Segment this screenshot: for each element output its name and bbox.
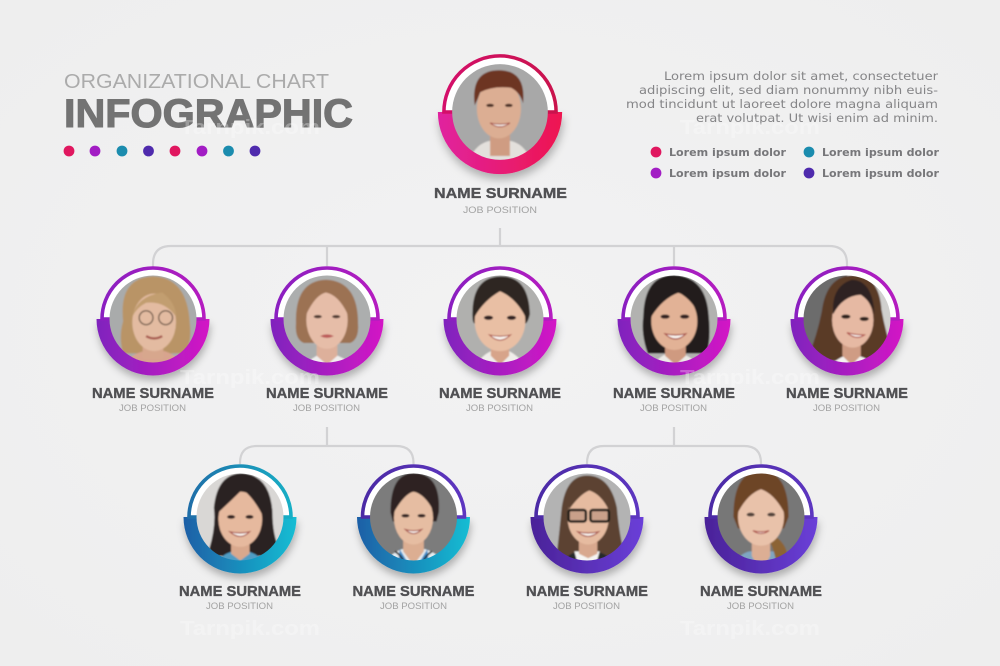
- legend: Lorem ipsum dolor: [669, 147, 787, 159]
- description paragraph: mod tincidunt ut laoreet dolore magna aliquam: [626, 97, 938, 111]
- node: row 2, person 1: NAME SURNAME: [92, 386, 214, 402]
- legend: [651, 147, 940, 180]
- watermarks: Tarnpik.com: [680, 618, 820, 640]
- legend: Lorem ipsum dolor: [822, 147, 940, 159]
- description paragraph: adipiscing elit, sed diam nonummy nibh euis-: [639, 83, 938, 97]
- watermarks: Tarnpik.com: [680, 117, 820, 139]
- title: INFOGRAPHIC: [64, 92, 353, 136]
- title: [64, 71, 353, 136]
- node: row 2, person 3: [439, 268, 561, 413]
- node: row 2, person 1: [92, 268, 214, 413]
- node: row 2, person 5: NAME SURNAME: [786, 386, 908, 402]
- node: row 2, person 1: JOB POSITION: [119, 403, 186, 413]
- node: row 2, person 5: [786, 268, 908, 413]
- org chart connector lines: [153, 228, 847, 464]
- node: top executive: NAME SURNAME: [434, 186, 567, 202]
- node: row 2, person 3: JOB POSITION: [466, 403, 533, 413]
- node: row 3, person 1: NAME SURNAME: [179, 584, 301, 600]
- node: row 2, person 4: NAME SURNAME: [613, 386, 735, 402]
- description paragraph: erat volutpat. Ut wisi enim ad minim.: [696, 111, 938, 125]
- node: row 2, person 2: [266, 268, 388, 413]
- description paragraph: Lorem ipsum dolor sit amet, consectetuer: [664, 69, 938, 83]
- node: row 3, person 4: [700, 466, 822, 611]
- decorative color dots row: [64, 146, 260, 156]
- node: row 3, person 3: JOB POSITION: [553, 601, 620, 611]
- node: top executive: JOB POSITION: [463, 205, 537, 215]
- node: row 3, person 1: JOB POSITION: [206, 601, 273, 611]
- node: row 3, person 4: NAME SURNAME: [700, 584, 822, 600]
- legend: Lorem ipsum dolor: [669, 168, 787, 180]
- description paragraph: [626, 69, 938, 125]
- node: row 2, person 5: JOB POSITION: [813, 403, 880, 413]
- node: row 2, person 3: NAME SURNAME: [439, 386, 561, 402]
- node: row 2, person 2: JOB POSITION: [293, 403, 360, 413]
- node: row 3, person 4: JOB POSITION: [727, 601, 794, 611]
- node: row 3, person 2: NAME SURNAME: [352, 584, 475, 600]
- node: row 3, person 3: [526, 466, 648, 611]
- node: row 2, person 2: NAME SURNAME: [266, 386, 388, 402]
- node: row 3, person 2: [352, 466, 475, 611]
- watermarks: Tarnpik.com: [180, 117, 320, 139]
- node: row 2, person 4: JOB POSITION: [640, 403, 707, 413]
- watermarks: [180, 117, 820, 640]
- watermarks: Tarnpik.com: [680, 367, 820, 389]
- node: row 2, person 4: [613, 268, 735, 413]
- watermarks: Tarnpik.com: [180, 367, 320, 389]
- title: ORGANIZATIONAL CHART: [64, 71, 329, 93]
- node: top executive: [434, 56, 567, 215]
- node: row 3, person 1: [179, 466, 301, 611]
- node: row 3, person 2: JOB POSITION: [380, 601, 447, 611]
- watermarks: Tarnpik.com: [180, 618, 320, 640]
- node: row 3, person 3: NAME SURNAME: [526, 584, 648, 600]
- legend: Lorem ipsum dolor: [822, 168, 940, 180]
